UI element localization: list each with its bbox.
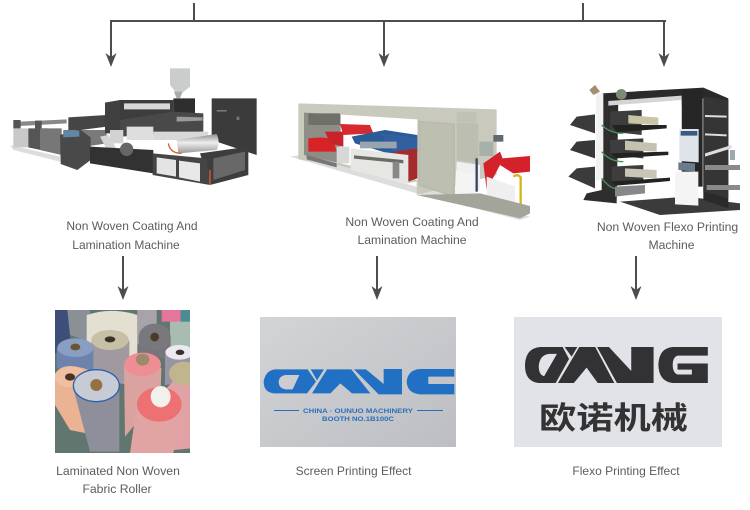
caption: coating machine middle: Non Woven Coating And [345, 215, 479, 229]
caption: coating machine middle [345, 215, 479, 247]
caption: fabric roller: Laminated Non Woven [56, 464, 180, 478]
arrow: to fabric roller [118, 256, 128, 300]
caption: coating machine left [66, 219, 198, 252]
arrow: to screen printing effect [372, 256, 382, 300]
photo: laminated fabric rollers [55, 310, 190, 453]
caption: screen printing effect: Screen Printing Effect [296, 464, 411, 478]
caption: coating machine middle: Lamination Machine [357, 233, 467, 247]
caption: coating machine left: Non Woven Coating And [66, 219, 198, 233]
arrow: to coating machine [106, 21, 116, 67]
logo: blue OYANG [264, 369, 454, 394]
image: coating and lamination machine [10, 68, 257, 185]
photo: screen printing effect [260, 317, 456, 447]
text: booth caption: CHINA · OUNUO MACHINERY [303, 409, 413, 415]
arrow: to flexo printing effect [630, 256, 642, 300]
caption: fabric roller [56, 464, 180, 496]
text: booth caption: BOOTH NO.1B100C [322, 417, 395, 423]
text: Chinese logo: 欧诺机械 [539, 393, 688, 438]
photo: flexo printing effect [514, 317, 722, 447]
text: booth caption [274, 409, 443, 423]
caption: flexo machine: Non Woven Flexo Printing [597, 220, 738, 234]
arrow: to screen machine [378, 21, 390, 67]
image: screen printing machine [290, 103, 530, 220]
caption: fabric roller: Fabric Roller [82, 482, 152, 496]
connector: top bracket [110, 3, 666, 21]
image: flexo printing machine [568, 85, 740, 215]
caption: flexo machine [597, 220, 738, 252]
caption: flexo printing effect: Flexo Printing Effect [572, 464, 680, 478]
caption: flexo machine: Machine [648, 238, 695, 252]
logo: black OYANG [525, 347, 708, 383]
arrow: to flexo machine [658, 21, 670, 67]
caption: coating machine left: Lamination Machine [72, 238, 180, 252]
